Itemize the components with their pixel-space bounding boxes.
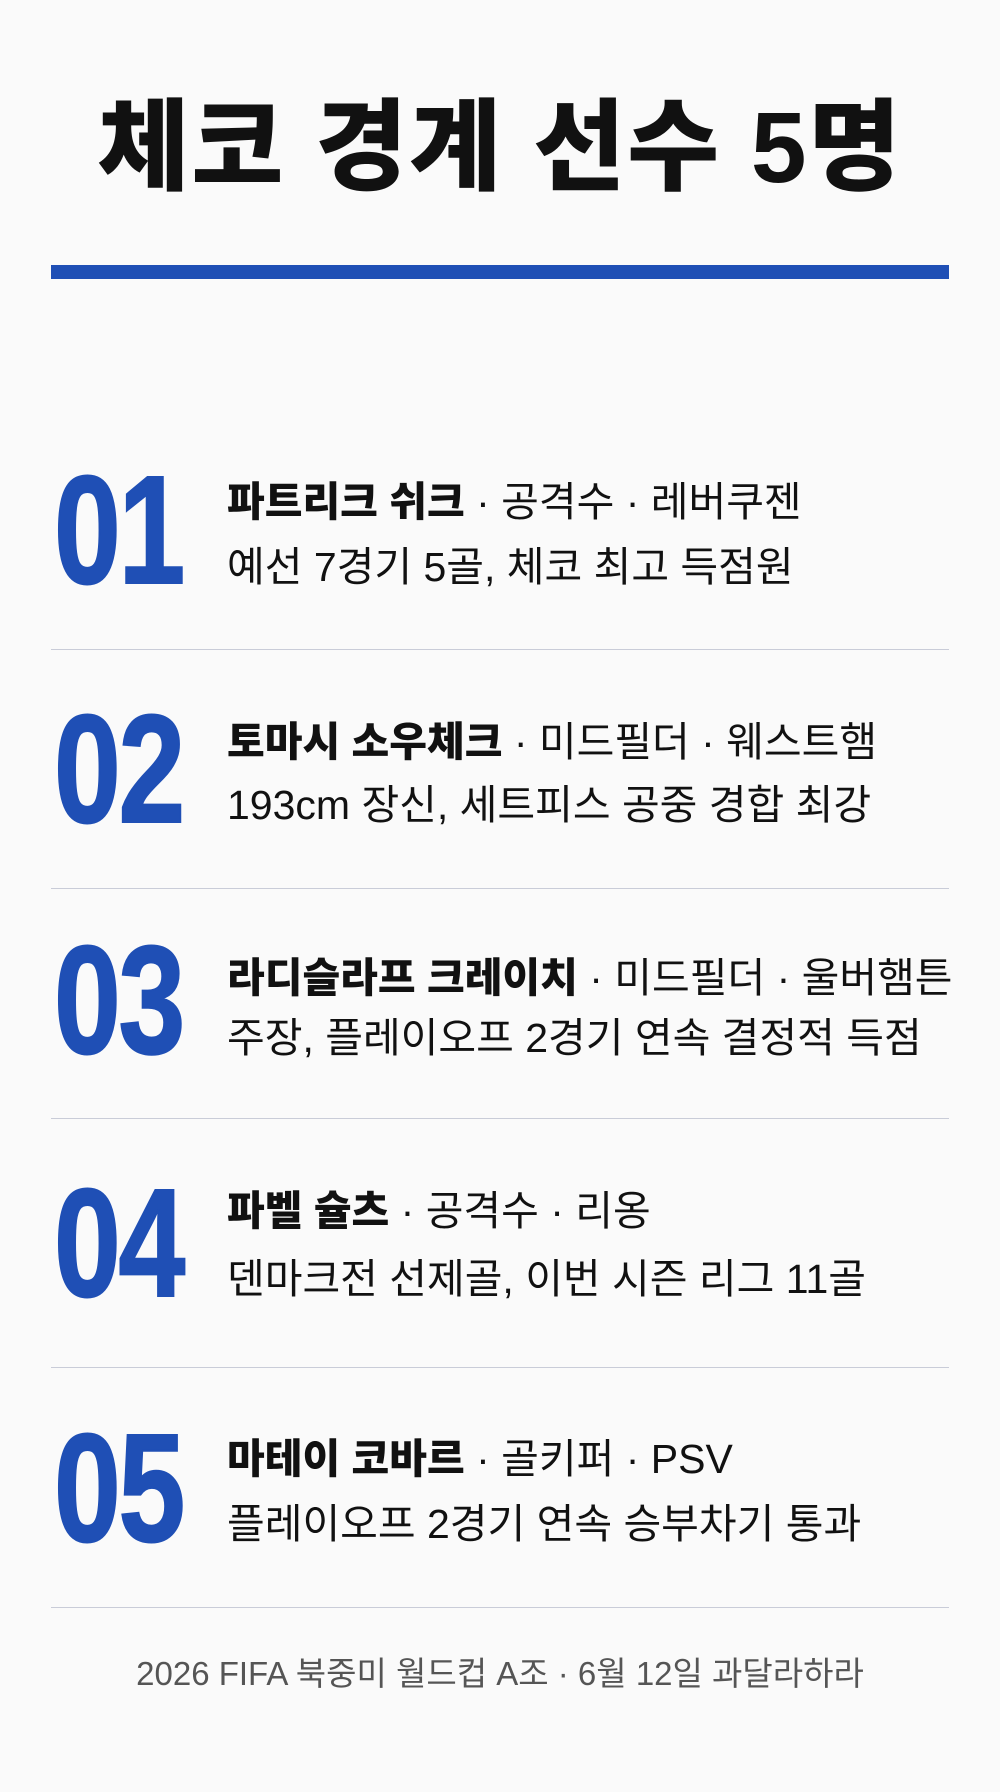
name line 02: 토마시 소우체크 · 미드필더 · 웨스트햄 [227, 719, 877, 765]
detail line 03: 주장, 플레이오프 2경기 연속 결정적 득점 [227, 1015, 922, 1061]
item 04 [54, 1157, 866, 1329]
item 01 [54, 444, 802, 616]
blue title underline [51, 265, 949, 279]
item 03 [54, 914, 953, 1086]
item 02 [54, 683, 877, 855]
detail line 01: 예선 7경기 5골, 체코 최고 득점원 [227, 544, 794, 590]
footer: 2026 FIFA 북중미 월드컵 A조 · 6월 12일 과달라하라 [136, 1655, 864, 1692]
name line 05: 마테이 코바르 · 골키퍼 · PSV [227, 1436, 733, 1482]
detail line 02: 193cm 장신, 세트피스 공중 경합 최강 [227, 782, 871, 828]
detail line 04: 덴마크전 선제골, 이번 시즌 리그 11골 [227, 1256, 866, 1302]
number 05: 05 [54, 1402, 183, 1574]
number 03: 03 [54, 914, 183, 1086]
title: 체코 경계 선수 5명 [98, 92, 902, 204]
number 04: 04 [54, 1157, 183, 1329]
name line 04: 파벨 슐츠 · 공격수 · 리옹 [227, 1188, 651, 1234]
item 05 [54, 1402, 861, 1574]
number 01: 01 [54, 444, 183, 616]
detail line 05: 플레이오프 2경기 연속 승부차기 통과 [227, 1501, 861, 1547]
number 02: 02 [54, 683, 183, 855]
name line 03: 라디슬라프 크레이치 · 미드필더 · 울버햄튼 [227, 955, 953, 1001]
name line 01: 파트리크 쉬크 · 공격수 · 레버쿠젠 [227, 479, 802, 525]
